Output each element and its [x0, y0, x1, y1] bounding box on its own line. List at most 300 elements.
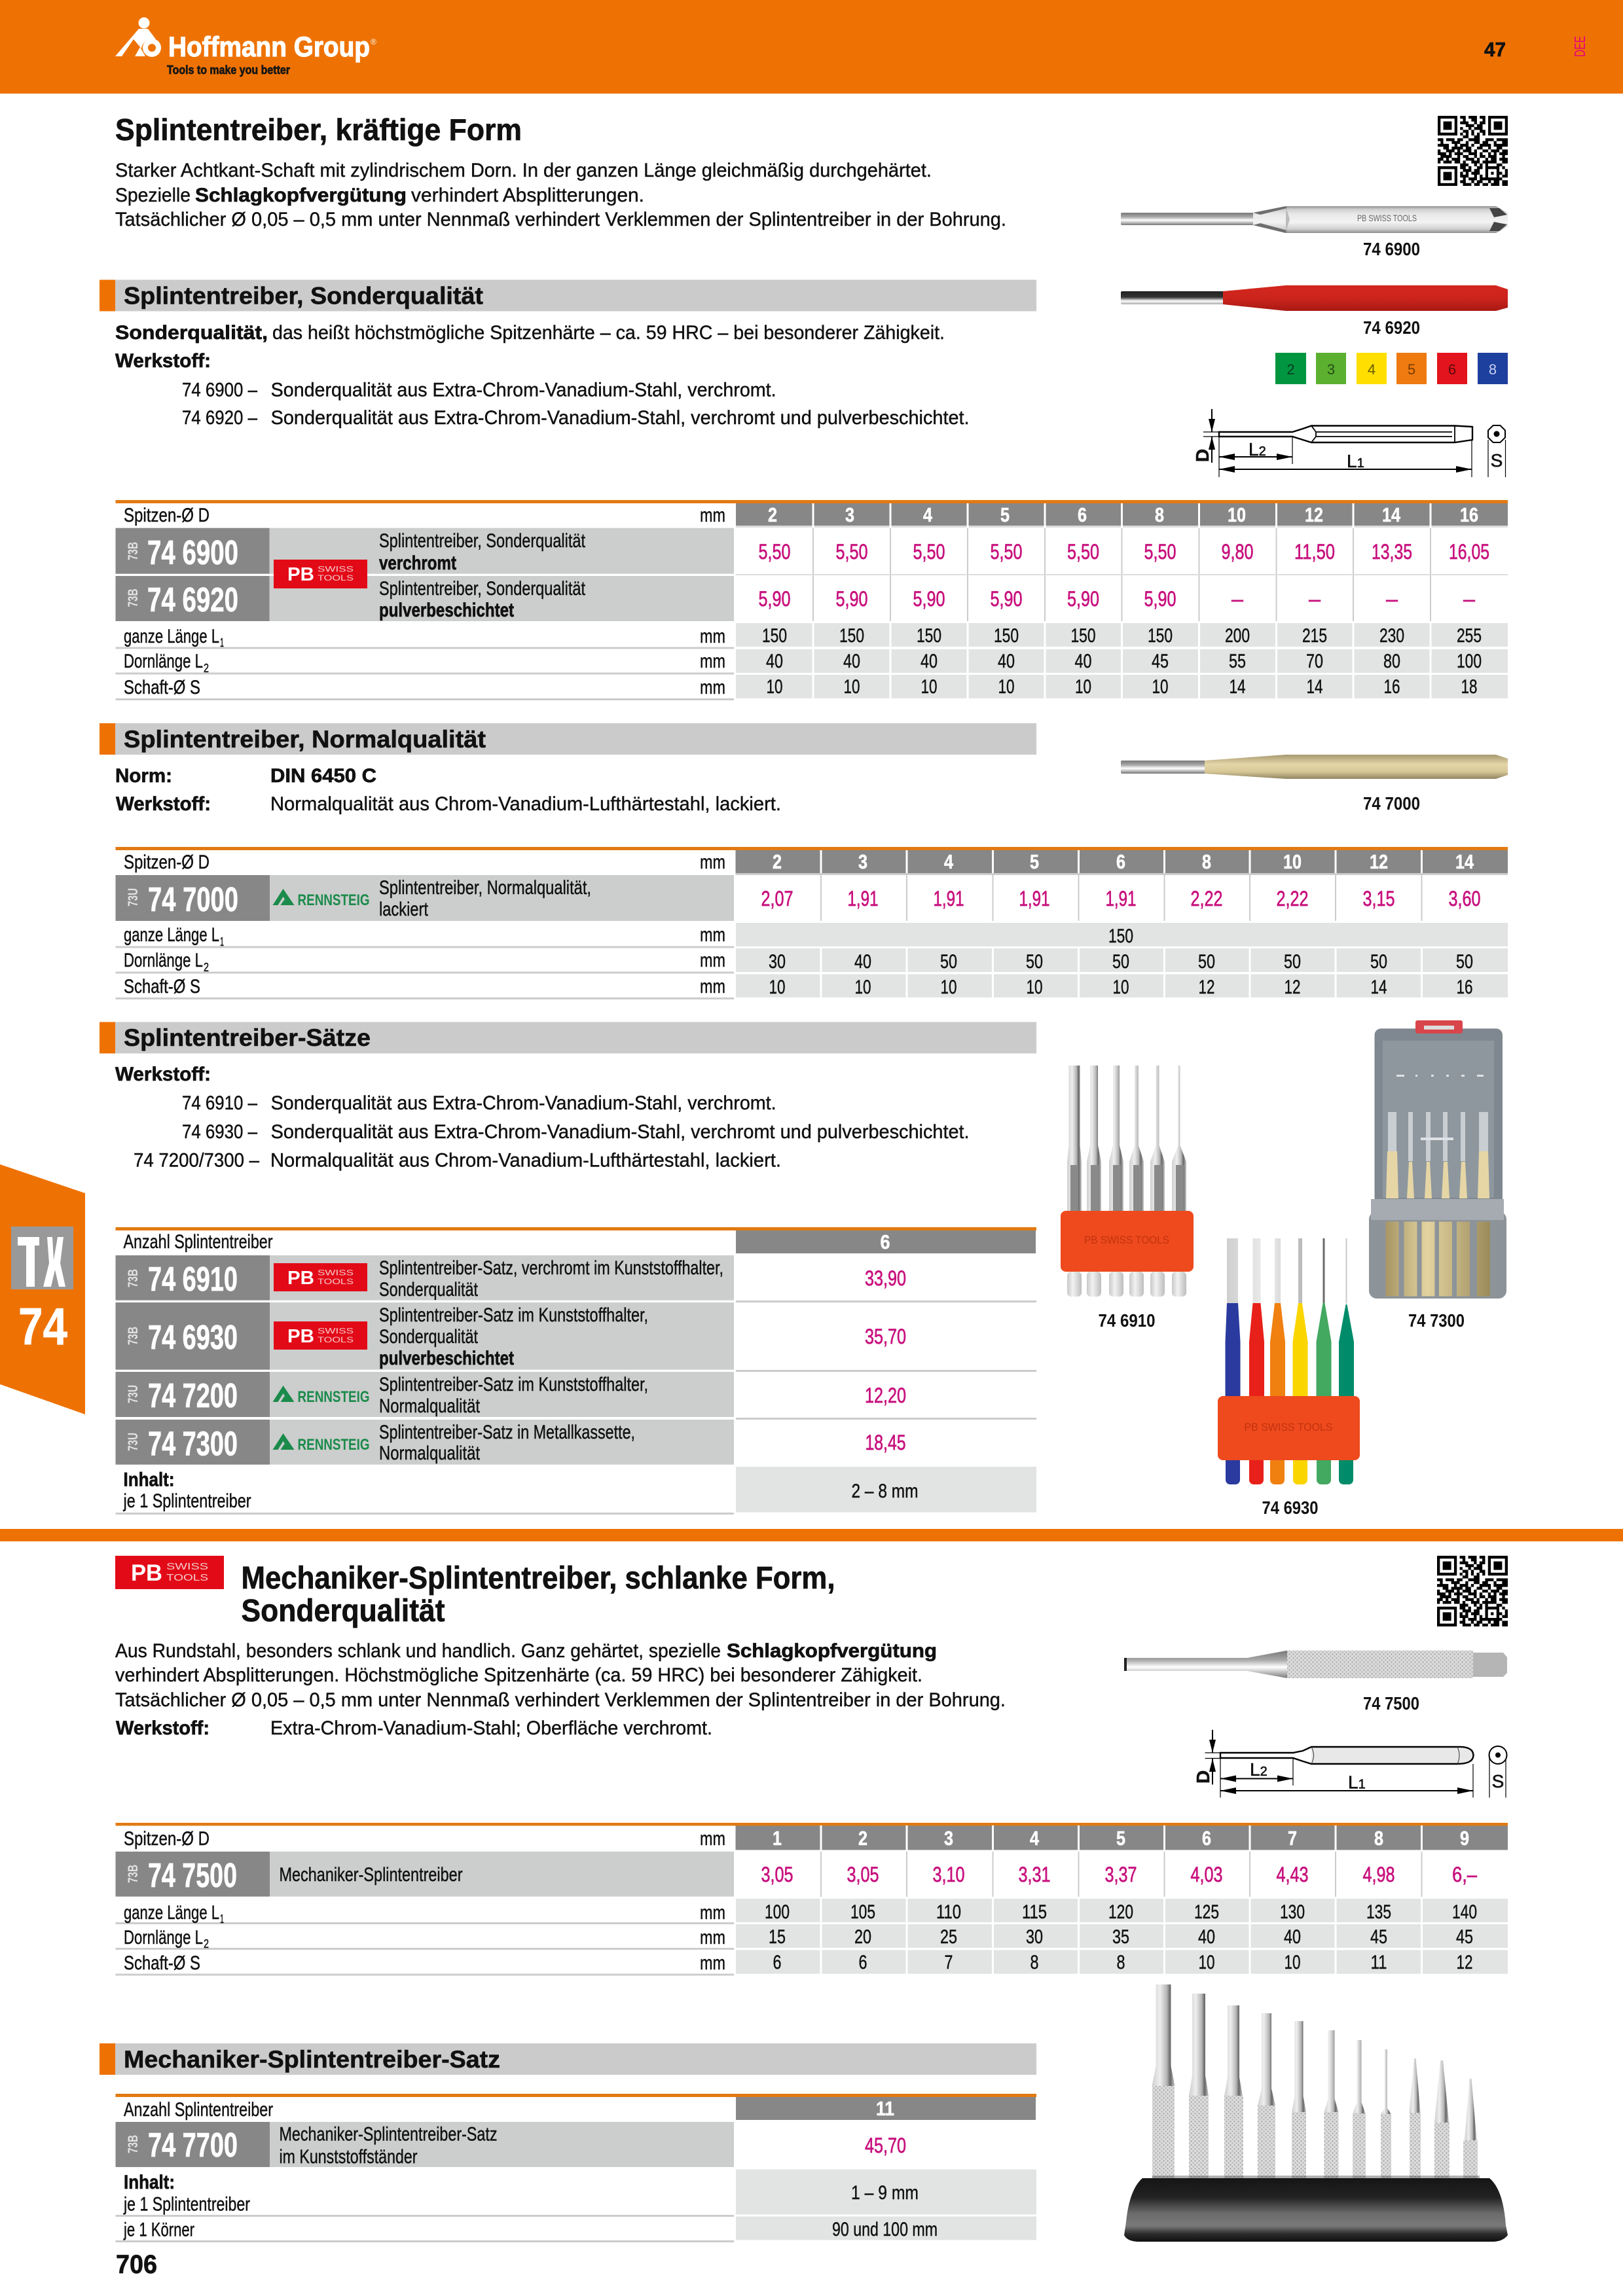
logo: PB Swiss Tools: PB: [287, 1326, 314, 1347]
text block: Sonderqualität description: das heißt höchstmögliche Spitzenhärte – ca. 59 HRC – bei besonderer Zähigkeit.: [272, 322, 945, 344]
row shaft diameter: 10: [1027, 977, 1042, 998]
text block: Werkstoff sets: Sonderqualität aus Extra-Chrom-Vanadium-Stahl, verchromt und pulverbeschichtet.: [271, 1121, 970, 1143]
header row: 11: [876, 2097, 894, 2120]
row pin length: 40: [766, 651, 783, 672]
title: Mechaniker-Splintentreiber: Mechaniker-Splintentreiber, schlanke Form,: [241, 1561, 835, 1596]
header row: 16: [1460, 503, 1478, 526]
row 74 6910: 74 6910: [148, 1261, 238, 1299]
header row: 3: [944, 1827, 953, 1850]
row 74 6900: 5,50: [758, 540, 791, 564]
colour key swatches: 8: [1489, 361, 1497, 378]
row 74 6900: verchromt: [379, 552, 456, 574]
colour key swatches: 5: [1408, 361, 1415, 378]
header row: 3: [845, 503, 854, 526]
row 74 7000: 2,07: [761, 887, 793, 910]
row pin length: mm: [700, 1927, 725, 1948]
row shaft diameter: Schaft-Ø S: [124, 976, 200, 997]
table: Sonderqualität sizes and prices: [115, 500, 1508, 699]
logo: Rennsteig: [272, 1386, 369, 1406]
row overall length: 150: [994, 625, 1019, 647]
logo: PB Swiss Tools large: [115, 1556, 224, 1589]
row shaft diameter: 12: [1285, 977, 1300, 998]
row shaft diameter: Schaft-Ø S: [124, 677, 200, 698]
row 74 6910: 73B: [126, 1269, 141, 1287]
row shaft diameter: 10: [1285, 1952, 1300, 1973]
row pin length: [124, 1926, 1473, 1950]
row 74 6930: 73B: [126, 1327, 141, 1345]
row shaft diameter: 6: [859, 1952, 867, 1973]
section header: Mechaniker-Satz: Mechaniker-Splintentreiber-Satz: [124, 2046, 500, 2073]
row 74 7300: 18,45: [866, 1431, 906, 1454]
row 74 6920: –: [1231, 587, 1243, 611]
row contents: Inhalt:: [124, 2172, 175, 2193]
row 74 6930: Splintentreiber-Satz im Kunststoffhalter,: [379, 1304, 648, 1326]
header row: Anzahl Splintentreiber: [124, 2099, 273, 2121]
language code: DEE: [1571, 36, 1588, 57]
logo: Hoffmann Group: Hoffmann Group: [168, 31, 370, 63]
row 74 6900: 11,50: [1294, 540, 1335, 564]
row 74 7000: 1,91: [1019, 887, 1050, 910]
logo: PB Swiss Tools large: TOOLS: [166, 1572, 208, 1583]
text block: Werkstoff sets: [115, 1064, 970, 1172]
row 74 7500: 4,03: [1190, 1863, 1223, 1886]
row overall length: [124, 625, 1482, 649]
row overall length: mm: [700, 626, 725, 647]
row shaft diameter: 10: [921, 676, 938, 698]
row shaft diameter: Schaft-Ø S: [124, 1952, 200, 1974]
row overall length: ganze Länge L: [124, 1902, 219, 1924]
row overall length: 1: [220, 935, 224, 948]
row pin length: [124, 950, 1473, 974]
row pin length: 30: [769, 951, 786, 973]
logo: Rennsteig: [272, 889, 369, 909]
row overall length: mm: [700, 924, 725, 946]
row 74 7000: 3,15: [1363, 887, 1395, 910]
text block: Werkstoff sets: Sonderqualität aus Extra-Chrom-Vanadium-Stahl, verchromt.: [271, 1092, 776, 1114]
row 74 7200: 12,20: [865, 1384, 906, 1407]
row 74 6900: 9,80: [1222, 540, 1253, 564]
text block: Werkstoff sets: 74 6910 –: [182, 1092, 257, 1114]
row pin length: 25: [940, 1926, 957, 1948]
row shaft diameter: 6: [773, 1952, 782, 1973]
header row: mm: [700, 1828, 725, 1850]
row overall length: 255: [1457, 625, 1482, 647]
row overall length: 150: [1108, 925, 1133, 947]
row 74 6900: 5,50: [1067, 540, 1099, 564]
row 74 6920: [126, 578, 1475, 621]
chapter tab 74: [0, 1164, 85, 1414]
row overall length: 105: [850, 1901, 875, 1923]
row 74 7000: 2,22: [1277, 887, 1308, 910]
text block: Norm and Werkstoff: DIN 6450 C: [270, 765, 376, 787]
row 74 7500: 4,43: [1277, 1863, 1308, 1886]
logo: PB Swiss Tools large: PB: [131, 1560, 162, 1586]
header row: 8: [1155, 503, 1164, 526]
row pin length: [124, 651, 1482, 675]
logo: PB Swiss Tools: TOOLS: [318, 1335, 354, 1344]
row shaft diameter: 14: [1307, 676, 1322, 698]
header row: Spitzen-Ø D: [124, 1828, 210, 1850]
image: punch 74 7000: [1121, 755, 1508, 779]
row overall length: 150: [1071, 625, 1096, 647]
header row: 5: [1116, 1827, 1125, 1850]
logo: PB Swiss Tools: TOOLS: [318, 1277, 354, 1286]
row 74 7200: [126, 1374, 906, 1417]
colour key swatches: 6: [1448, 361, 1456, 378]
header row: 10: [1283, 850, 1302, 873]
row 74 6930: [126, 1304, 906, 1369]
row pin length: 40: [843, 651, 860, 672]
technical drawing: round punch: L1: [1348, 1772, 1366, 1792]
row shaft diameter: 14: [1230, 676, 1245, 698]
text block: Norm and Werkstoff: Werkstoff:: [116, 793, 211, 815]
text block: Mechaniker description: Extra-Chrom-Vanadium-Stahl; Oberfläche verchromt.: [270, 1717, 712, 1739]
image: set 74 6930: [1218, 1238, 1360, 1484]
row 74 7000: 1,91: [934, 887, 964, 910]
row shaft diameter: 10: [1075, 676, 1091, 698]
row overall length: 230: [1379, 625, 1404, 647]
row 74 7500: 73B: [126, 1865, 141, 1883]
row 74 6910: 33,90: [865, 1266, 906, 1290]
title: Splintentreiber, kräftige Form: [115, 113, 522, 147]
logo: PB Swiss Tools: SWISS: [318, 1268, 354, 1278]
row pin length: 40: [854, 951, 871, 973]
row pin length: 35: [1112, 1926, 1129, 1948]
colour key swatches: 4: [1368, 361, 1376, 378]
row 74 6930: pulverbeschichtet: [379, 1348, 514, 1369]
row 74 6900: 73B: [126, 542, 141, 560]
technical drawing: octagonal punch: [1192, 409, 1506, 477]
row 74 7700: 73B: [126, 2135, 141, 2153]
row 74 6920: 73B: [126, 589, 141, 607]
row overall length: ganze Länge L: [124, 924, 219, 946]
row contents: je 1 Körner: [123, 2219, 194, 2241]
label 74 6910: 74 6910: [1099, 1310, 1155, 1331]
logo: PB Swiss Tools: SWISS: [318, 564, 354, 573]
row 74 6900: 5,50: [835, 540, 868, 564]
logo: Hoffmann Group: [115, 17, 376, 77]
row 74 6930: 35,70: [865, 1325, 906, 1348]
row shaft diameter: 18: [1461, 676, 1477, 698]
row pin length: 70: [1306, 651, 1323, 672]
header row: 2: [773, 850, 782, 873]
intro text: Schlagkopfvergütung: [195, 185, 407, 206]
row 74 7500: 74 7500: [148, 1857, 237, 1895]
text block: Mechaniker description: Aus Rundstahl, besonders schlank und handlich. Ganz gehärtet, spezielle: [115, 1640, 721, 1662]
section header: Sätze: Splintentreiber-Sätze: [124, 1024, 371, 1051]
row 74 7500: [126, 1857, 1477, 1895]
row 74 7200: Normalqualität: [379, 1395, 481, 1417]
row 74 6910: Splintentreiber-Satz, verchromt im Kunststoffhalter,: [379, 1257, 723, 1279]
section header: Normalqualität: [100, 723, 1036, 755]
row 74 6900: [126, 530, 1489, 574]
header row: 5: [1030, 850, 1039, 873]
row pin length: 50: [940, 951, 957, 973]
header row: 4: [944, 850, 954, 873]
row 74 7000: 3,60: [1448, 887, 1481, 910]
row pin length: 50: [1112, 951, 1129, 973]
header row: Spitzen-Ø D: [124, 505, 210, 526]
logo: Rennsteig: RENNSTEIG: [297, 891, 369, 909]
row 74 6920: –: [1309, 587, 1321, 611]
icon: hammer and pliers: [18, 1237, 65, 1287]
row overall length: 150: [1148, 625, 1173, 647]
row pin length: Dornlänge L: [124, 1927, 203, 1948]
technical drawing: octagonal punch: L2: [1249, 439, 1266, 459]
row 74 7700: 74 7700: [148, 2126, 238, 2164]
row 74 7300: [126, 1422, 906, 1464]
text block: Sonderqualität description: Sonderqualität,: [115, 322, 268, 344]
row 74 7500: 3,37: [1105, 1863, 1137, 1886]
header row: [124, 850, 1474, 873]
row overall length: 110: [936, 1901, 961, 1923]
row 74 7300: 73U: [126, 1433, 141, 1451]
row pin length: 2: [204, 662, 209, 675]
table: Normalqualität sizes and prices: [115, 847, 1508, 999]
header row: 6: [1116, 850, 1125, 873]
image: set 74 6930: PB SWISS TOOLS: [1244, 1421, 1333, 1433]
row shaft diameter: 12: [1456, 1952, 1473, 1973]
label 74 7300: 74 7300: [1408, 1310, 1465, 1331]
row shaft diameter: 7: [944, 1952, 953, 1973]
row 74 7000: 2,22: [1190, 887, 1223, 910]
label 74 7500: 74 7500: [1363, 1693, 1419, 1713]
header row: 8: [1202, 850, 1211, 873]
text block: Norm and Werkstoff: Normalqualität aus Chrom-Vanadium-Lufthärtestahl, lackiert.: [270, 793, 781, 815]
technical drawing: octagonal punch: L1: [1347, 451, 1364, 471]
row 74 6900: 5,50: [990, 540, 1023, 564]
section header: Sonderqualität: Splintentreiber, Sonderqualität: [124, 283, 483, 309]
logo: Hoffmann Group: Tools to make you better: [167, 63, 290, 77]
row 74 7500: 3,05: [761, 1863, 793, 1886]
text block: Norm and Werkstoff: [115, 765, 781, 815]
header row: 6: [1202, 1827, 1211, 1850]
row shaft diameter: 11: [1371, 1952, 1387, 1973]
row 74 6920: 5,90: [913, 587, 945, 611]
text block: Sonderqualität description: Werkstoff:: [115, 350, 211, 372]
row overall length: [124, 1901, 1477, 1926]
row shaft diameter: 10: [998, 676, 1015, 698]
row 74 7700: [126, 2123, 906, 2168]
row overall length: mm: [700, 1902, 725, 1924]
logo: Hoffmann Group: ®: [371, 37, 376, 46]
table: Mechaniker sizes and prices: [115, 1823, 1508, 1975]
title: Mechaniker-Splintentreiber: Sonderqualität: [241, 1594, 445, 1628]
row 74 6920: 5,90: [758, 587, 791, 611]
row contents: je 1 Splintentreiber: [123, 2194, 250, 2215]
header row: 14: [1382, 503, 1401, 526]
row 74 7000: 1,91: [1105, 887, 1137, 910]
intro text: [115, 160, 1006, 230]
row 74 7500: 3,10: [932, 1863, 965, 1886]
row 74 7200: 74 7200: [148, 1377, 238, 1415]
logo: PB Swiss Tools: TOOLS: [318, 573, 354, 583]
header row: 1: [773, 1827, 782, 1850]
technical drawing: octagonal punch: S: [1491, 450, 1503, 471]
technical drawing: round punch: L2: [1250, 1759, 1267, 1780]
row 74 7500: 6,–: [1452, 1863, 1477, 1886]
intro text: Starker Achtkant-Schaft mit zylindrischem Dorn. In der ganzen Länge gleichmäßig durchgehärtet.: [115, 160, 932, 181]
header row: Anzahl Splintentreiber: [123, 1231, 273, 1253]
logo: PB Swiss Tools: [274, 1321, 367, 1350]
image: stand set 74 7700: [1124, 1984, 1508, 2242]
technical drawing: round punch: S: [1492, 1771, 1504, 1791]
header row: Spitzen-Ø D: [124, 852, 210, 873]
row shaft diameter: 10: [1198, 1952, 1215, 1973]
header row: 12: [1305, 503, 1323, 526]
row shaft diameter: 16: [1384, 676, 1400, 698]
header row: 4: [923, 503, 933, 526]
header band: [0, 0, 1623, 94]
row contents: je 1 Splintentreiber: [123, 1490, 251, 1512]
row pin length: 100: [1457, 651, 1482, 672]
label 74 6930: 74 6930: [1262, 1498, 1319, 1518]
row overall length: 1: [220, 1912, 224, 1926]
row pin length: 40: [1198, 1926, 1215, 1948]
row pin length: 50: [1026, 951, 1043, 973]
row pin length: 45: [1370, 1926, 1387, 1948]
technical drawing: round punch: [1193, 1730, 1507, 1797]
row shaft diameter: [124, 676, 1477, 698]
header row: 5: [1000, 503, 1010, 526]
row shaft diameter: 10: [843, 676, 860, 698]
row contents: 90 und 100 mm: [832, 2219, 938, 2240]
row 74 6930: Sonderqualität: [379, 1326, 479, 1348]
row 74 6900: 16,05: [1449, 540, 1489, 564]
row 74 6920: 5,90: [1144, 587, 1176, 611]
row 74 7700: 45,70: [865, 2134, 906, 2157]
image: punch 74 6900: [1121, 206, 1508, 233]
row pin length: 80: [1383, 651, 1400, 672]
table: Mechaniker set: [115, 2094, 1036, 2241]
image: punch 74 6920: [1121, 285, 1508, 311]
row 74 6900: 74 6900: [147, 534, 238, 572]
colour key swatches: 3: [1327, 361, 1335, 378]
row pin length: 15: [769, 1926, 786, 1948]
row shaft diameter: mm: [700, 1952, 725, 1974]
row 74 7700: im Kunststoffständer: [279, 2146, 418, 2168]
label 74 6900: 74 6900: [1363, 239, 1420, 259]
header row: 9: [1460, 1827, 1469, 1850]
row contents: 2 – 8 mm: [851, 1480, 918, 1502]
text block: Mechaniker description: verhindert Absplitterungen. Höchstmögliche Spitzenhärte (ca. 59 HRC) bei besonderer Zähigkeit.: [115, 1664, 922, 1686]
header row: [124, 2097, 894, 2121]
text block: Werkstoff sets: Normalqualität aus Chrom-Vanadium-Lufthärtestahl, lackiert.: [270, 1149, 781, 1172]
row pin length: 2: [204, 961, 209, 974]
row overall length: 115: [1022, 1901, 1047, 1923]
label 74 7000: 74 7000: [1363, 793, 1420, 814]
title: Mechaniker-Splintentreiber: [241, 1561, 835, 1628]
row shaft diameter: 10: [766, 676, 783, 698]
text block: Mechaniker description: Tatsächlicher Ø 0,05 – 0,5 mm unter Nennmaß verhindert Verklemmen der Splintentreiber in der Bohrung.: [115, 1689, 1006, 1711]
row 74 6910: Sonderqualität: [379, 1279, 479, 1300]
catalog section number: 47: [1484, 38, 1506, 61]
image: set 74 6910: [1061, 1066, 1194, 1297]
header row: mm: [700, 852, 725, 873]
row 74 6920: 5,90: [835, 587, 868, 611]
row shaft diameter: 10: [1113, 977, 1129, 998]
row pin length: 30: [1026, 1926, 1043, 1948]
row 74 7200: Splintentreiber-Satz im Kunststoffhalter,: [379, 1374, 648, 1395]
logo: PB Swiss Tools: [274, 1263, 367, 1291]
row 74 7500: 4,98: [1363, 1863, 1395, 1886]
row shaft diameter: [124, 1952, 1473, 1974]
logo: Rennsteig: RENNSTEIG: [297, 1436, 369, 1454]
row overall length: 150: [839, 625, 864, 647]
page number: 706: [116, 2250, 157, 2279]
row 74 6920: 5,90: [990, 587, 1023, 611]
chapter tab 74: 74: [18, 1297, 67, 1355]
logo: PB Swiss Tools: PB: [287, 1268, 314, 1289]
header row: 2: [858, 1827, 867, 1850]
text block: Sonderqualität description: Sonderqualität aus Extra-Chrom-Vanadium-Stahl, verchromt und pulverbeschichtet.: [271, 407, 970, 429]
QR code bottom: [1437, 1556, 1508, 1626]
row shaft diameter: 8: [1030, 1952, 1038, 1973]
row shaft diameter: 12: [1198, 977, 1215, 998]
row 74 7500: 3,31: [1019, 1863, 1050, 1886]
row pin length: Dornlänge L: [124, 950, 203, 971]
row pin length: 20: [854, 1926, 871, 1948]
row pin length: 50: [1284, 951, 1301, 973]
row 74 6920: –: [1463, 587, 1475, 611]
intro text: Tatsächlicher Ø 0,05 – 0,5 mm unter Nennmaß verhindert Verklemmen der Splintentreiber in der Bohrung.: [115, 209, 1006, 230]
row pin length: 2: [204, 1937, 209, 1950]
image: punch 74 6900: PB SWISS TOOLS: [1357, 213, 1417, 223]
row overall length: 150: [917, 625, 941, 647]
header row: 6: [1078, 503, 1087, 526]
row overall length: 1: [220, 636, 224, 649]
row shaft diameter: 14: [1371, 977, 1387, 998]
row overall length: 140: [1452, 1901, 1477, 1923]
row 74 7500: Mechaniker-Splintentreiber: [279, 1864, 462, 1886]
row 74 7000: 74 7000: [148, 881, 238, 919]
row shaft diameter: [124, 976, 1473, 998]
row pin length: 40: [998, 651, 1015, 672]
text block: Mechaniker description: Werkstoff:: [116, 1717, 210, 1739]
row pin length: 45: [1152, 651, 1169, 672]
section header: Sonderqualität: [100, 280, 1036, 312]
section: Splintentreiber, kräftige Form intro: [115, 113, 1006, 230]
row contents: [123, 1469, 919, 1512]
logo: Rennsteig: [272, 1433, 369, 1454]
row overall length: 120: [1108, 1901, 1133, 1923]
row 74 7300: Normalqualität: [379, 1443, 481, 1464]
technical drawing: round punch: D: [1193, 1770, 1213, 1784]
row shaft diameter: mm: [700, 677, 725, 698]
row 74 7300: 74 7300: [148, 1426, 238, 1463]
label 74 6920: 74 6920: [1363, 317, 1420, 338]
text block: Sonderqualität description: 74 6920 –: [182, 407, 257, 429]
row 74 6900: 13,35: [1372, 540, 1412, 564]
row 74 6910: [126, 1257, 906, 1300]
divider band: [0, 1529, 1623, 1541]
row 74 7500: 3,05: [847, 1863, 879, 1886]
logo: PB Swiss Tools: [274, 560, 367, 588]
header row: [124, 503, 1478, 526]
text block: Werkstoff sets: 74 6930 –: [182, 1121, 257, 1143]
header row: 4: [1030, 1827, 1040, 1850]
row shaft diameter: mm: [700, 976, 725, 997]
colour key swatches: [1275, 353, 1508, 384]
text block: Werkstoff sets: 74 7200/7300 –: [134, 1149, 259, 1172]
row overall length: 100: [765, 1901, 790, 1923]
row pin length: 40: [1075, 651, 1092, 672]
logo: PB Swiss Tools large: SWISS: [166, 1561, 208, 1572]
text block: Sonderqualität description: 74 6900 –: [182, 380, 257, 401]
row overall length: 130: [1280, 1901, 1305, 1923]
header row: 3: [858, 850, 867, 873]
intro text: Spezielle: [115, 185, 191, 206]
